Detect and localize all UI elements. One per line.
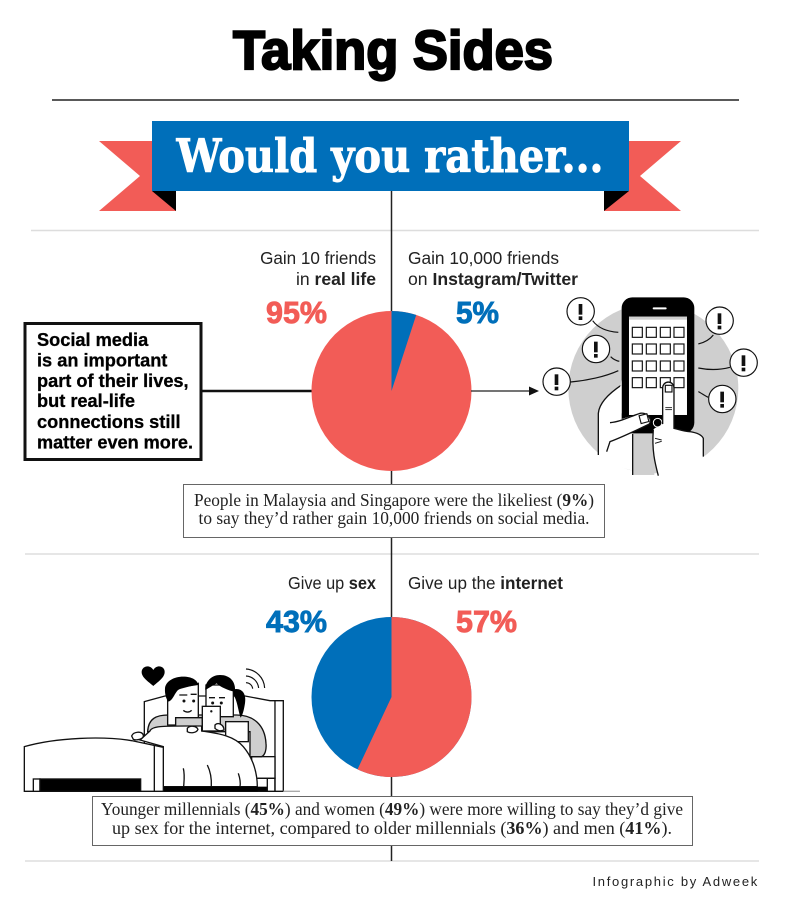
credit: Infographic by Adweek: [592, 874, 759, 889]
label: in real life: in real life: [296, 270, 376, 289]
stat: 95%: 95%: [266, 295, 327, 330]
note: younger millennials: up sex for the internet, compared to older millennials ( 36%) and men (41%).: [112, 818, 672, 838]
note: younger millennials: Younger millennials (45%) and women (49%) were more willing to say they’d give: [101, 799, 683, 819]
note: Malaysia and Singapore: [184, 484, 604, 538]
label: give up the internet: Give up the internet: [408, 574, 563, 593]
label: gain 10,000 friends: Gain 10,000 friends: [408, 249, 559, 268]
banner: would you rather: [99, 121, 681, 211]
title: Taking Sides: [233, 19, 553, 81]
callout: social media: is an important: [37, 350, 167, 370]
label: on Instagram/Twitter: on Instagram/Twitter: [408, 270, 578, 289]
callout: social media: connections still: [37, 412, 181, 432]
connector line: [201, 390, 312, 392]
label: give up sex: Give up sex: [288, 574, 376, 593]
stat: 57%: 57%: [456, 604, 517, 639]
pie chart: sex vs internet: [312, 617, 472, 777]
banner: would you rather: Would you rather...: [176, 129, 603, 183]
note: Malaysia and Singapore: People in Malaysia and Singapore were the likeliest (9%): [194, 490, 594, 510]
arrow: [471, 386, 539, 396]
note: younger millennials: [92, 796, 692, 846]
callout: social media: [25, 324, 201, 460]
pie chart: friends: [312, 311, 472, 471]
icon: phone with alerts: [543, 297, 757, 476]
callout: social media: part of their lives,: [37, 371, 189, 391]
callout: social media: matter even more.: [37, 432, 193, 452]
stat: 5%: 5%: [456, 295, 499, 330]
callout: social media: but real-life: [37, 391, 135, 411]
callout: social media: Social media: [37, 330, 149, 350]
stat: 43%: 43%: [266, 604, 327, 639]
note: Malaysia and Singapore: to say they’d rather gain 10,000 friends on social media.: [198, 508, 590, 528]
icon: couple in bed: [24, 666, 300, 791]
label: gain 10 friends: Gain 10 friends: [260, 249, 376, 268]
